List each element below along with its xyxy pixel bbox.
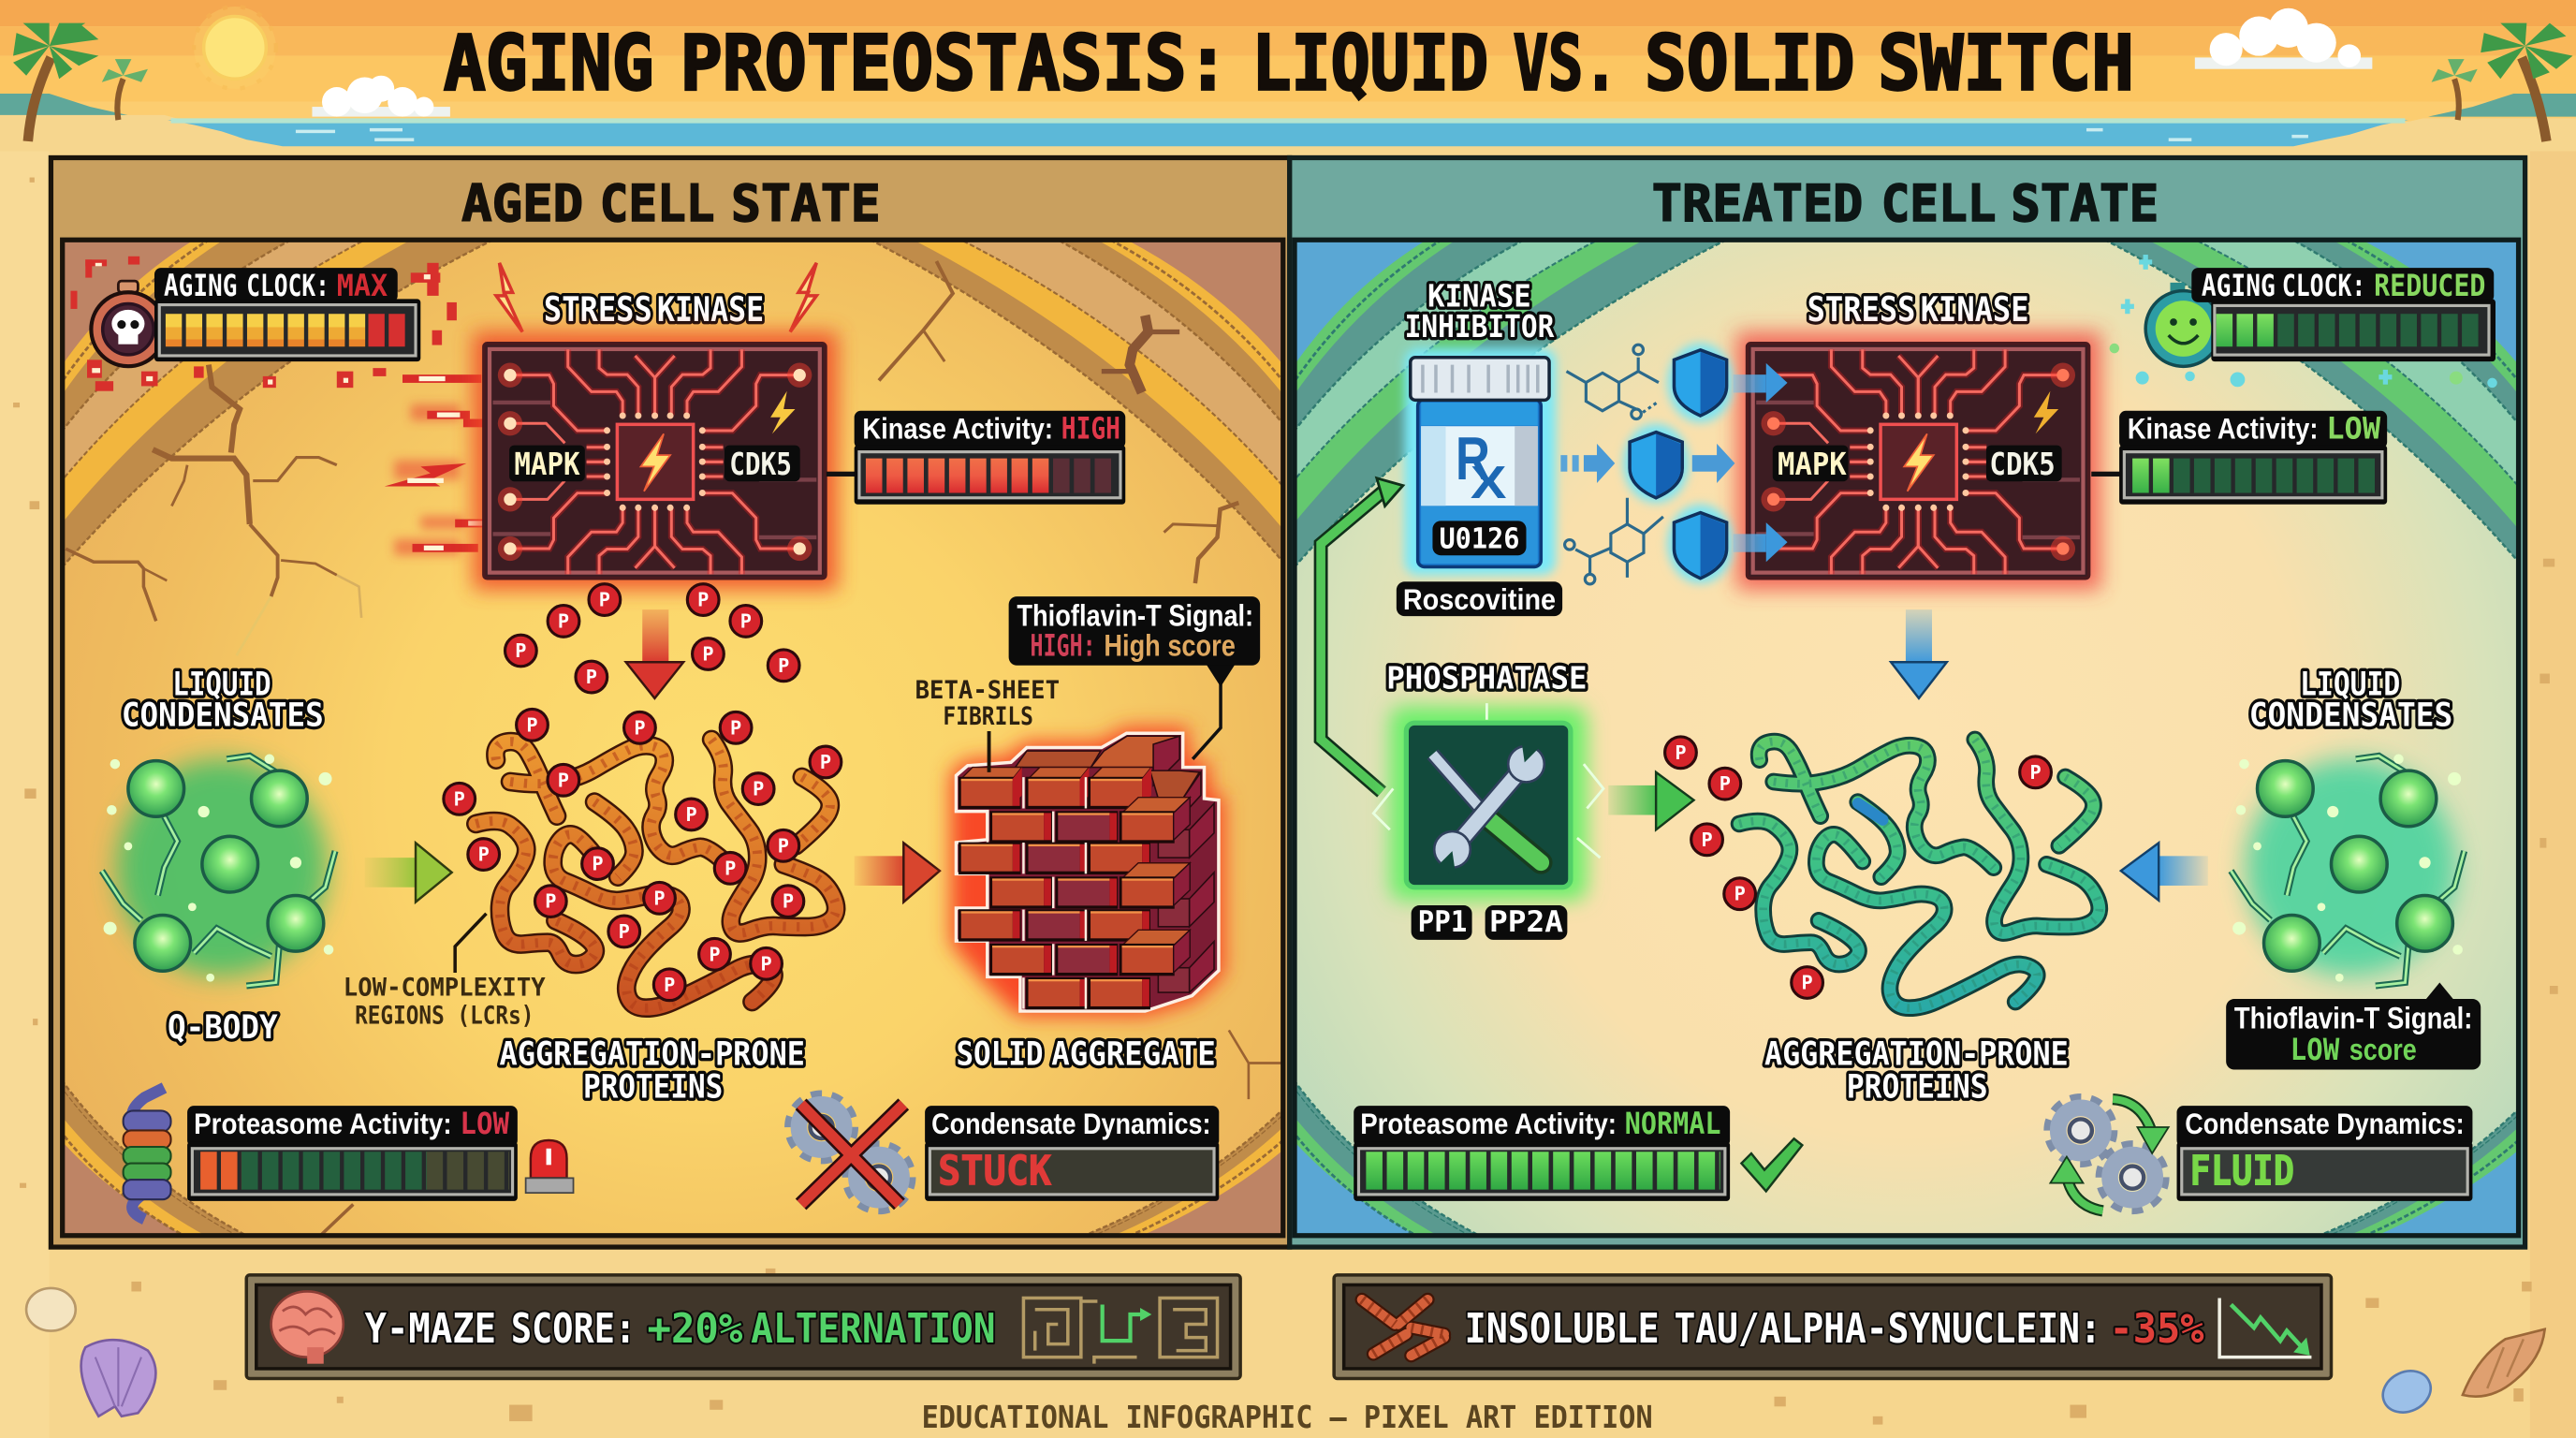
heading: aged: AGED	[461, 174, 583, 233]
released phospho groups: P	[1675, 741, 1687, 764]
aged: lightning bolts	[496, 263, 816, 332]
treated: protein labels: AGGREGATION-PRONE	[1764, 1034, 2069, 1073]
icon: alarm light	[526, 1140, 574, 1193]
icon: shield bottom	[1674, 513, 1727, 579]
label: aging clock max: MAX	[337, 270, 388, 303]
title: AGING	[444, 21, 654, 109]
icon: shield top	[1674, 350, 1727, 416]
treated: proteasome activity gauge	[1354, 1106, 1730, 1201]
icon: palm tree left	[13, 23, 148, 141]
aged: phospho groups above arrow: P	[702, 643, 714, 666]
aged: phospho groups above arrow: P	[515, 639, 526, 662]
label: aging clock reduced: REDUCED	[2374, 270, 2485, 303]
aged: kinase chip	[473, 332, 838, 590]
aged: solid aggregate label: AGGREGATE	[1051, 1034, 1216, 1073]
icon: conch shell	[2463, 1329, 2545, 1397]
treated: proteasome activity gauge: NORMAL	[1625, 1108, 1720, 1141]
icon: blue pebble	[2376, 1363, 2437, 1420]
treated: proteasome activity gauge: Proteasome Activity:	[1360, 1107, 1617, 1140]
phospho marks on tangle: P	[592, 853, 604, 875]
treated: kinase inhibitor label: INHIBITOR	[1405, 308, 1555, 345]
label: aging clock reduced: CLOCK:	[2282, 270, 2365, 303]
aged: LCR callout: LOW-COMPLEXITY	[344, 975, 546, 1003]
treated: stress kinase label: STRESS	[1808, 289, 1915, 330]
cell background: aged	[65, 242, 1281, 1234]
icon: purple shell	[81, 1340, 155, 1416]
title: VS.	[1513, 21, 1618, 109]
released phospho groups: P	[1734, 883, 1746, 905]
label: CDK5: CDK5	[1989, 446, 2056, 482]
aged: q-body label: Q-BODY	[168, 1008, 278, 1047]
label: CDK5: CDK5	[729, 446, 792, 482]
phospho marks on tangle: P	[783, 890, 794, 913]
treated: condensate dynamics: FLUID	[2190, 1147, 2294, 1195]
title: SOLID	[1645, 21, 1855, 109]
title	[444, 21, 2134, 109]
treated: shields and inhibition arrows	[1560, 344, 1788, 583]
panel: treated cell state	[1290, 157, 2525, 1247]
phospho marks on tangle: P	[558, 769, 569, 791]
label: aging clock reduced: AGING	[2202, 270, 2276, 303]
aged: beta-sheet fibrils callout: BETA-SHEET	[915, 677, 1060, 705]
aged: proteasome activity gauge	[187, 1106, 518, 1201]
phospho marks on tangle: P	[778, 834, 789, 857]
heading: treated: STATE	[2011, 174, 2159, 233]
aged: down arrow	[626, 609, 683, 698]
aged: solid aggregate label: SOLID	[956, 1034, 1043, 1073]
treated: protein labels: PROTEINS	[1847, 1067, 1988, 1106]
aged: LCR callout	[344, 914, 546, 1030]
result plaque: insoluble tau	[1334, 1275, 2331, 1378]
treated: aging clock gauge	[2110, 255, 2497, 388]
heading: treated: CELL	[1881, 174, 1996, 233]
released phospho groups: P	[1802, 972, 1813, 994]
heading: treated: TREATED	[1652, 174, 1863, 233]
treated: kinase activity gauge	[2091, 411, 2387, 505]
treated: condensate dynamics: Condensate Dynamics:	[2185, 1107, 2465, 1140]
treated: phosphatase label: PHOSPHATASE	[1386, 659, 1587, 696]
aged: protein labels: PROTEINS	[583, 1067, 723, 1106]
footer: EDUCATIONAL INFOGRAPHIC — PIXEL ART EDITION	[922, 1399, 1653, 1435]
aged: motion sparks	[385, 374, 487, 555]
icon: check mark	[1741, 1138, 1802, 1191]
title: PROTEOSTASIS:	[681, 21, 1229, 109]
treated: thioflavin-T callout: LOW	[2291, 1034, 2340, 1067]
icon: cream shell	[26, 1288, 76, 1331]
gauge bar: aging clock	[2211, 299, 2496, 361]
label: MAPK: MAPK	[514, 446, 580, 482]
aged: solid aggregate label	[956, 1034, 1216, 1073]
back blocks	[1016, 736, 1214, 992]
icon: chip bolt	[640, 433, 670, 492]
phospho marks on tangle: P	[545, 890, 556, 913]
treated: molecule icons	[1565, 345, 1663, 584]
icon: cloud left	[312, 76, 450, 117]
result plaque: y-maze score: Y-MAZE	[365, 1305, 496, 1353]
phospho marks on tangle: P	[685, 803, 697, 826]
treated: drug bottle	[1405, 348, 1556, 575]
panel: aged cell state	[51, 157, 1290, 1247]
cell background: treated	[1297, 242, 2516, 1234]
aged: protein labels: AGGREGATION-PRONE	[500, 1034, 805, 1073]
treated: stress kinase label: KINASE	[1921, 289, 2029, 330]
title: LIQUID	[1251, 21, 1488, 109]
treated: kinase inhibitor label	[1405, 277, 1555, 345]
aged: solid aggregate brick stack	[955, 733, 1219, 1011]
phospho marks on tangle: P	[526, 713, 538, 736]
treated: thioflavin-T callout: Thioflavin-T Signal:	[2234, 1002, 2472, 1035]
treated: drug bottle: R	[1456, 424, 1490, 492]
aged: phospho groups above arrow: P	[778, 654, 789, 677]
sky and ocean banner	[0, 0, 2576, 151]
treated: kinase chip	[1736, 332, 2101, 590]
aged: phospho groups above arrow: P	[740, 609, 752, 632]
phospho marks on tangle: P	[820, 751, 831, 773]
aged: phospho groups above arrow: P	[586, 666, 597, 688]
icon: maze	[1023, 1298, 1218, 1364]
label: aging clock max	[154, 268, 398, 303]
heading: aged	[461, 174, 881, 233]
result plaque: y-maze score: SCORE:	[511, 1305, 636, 1353]
treated: thioflavin-T callout	[2226, 983, 2481, 1070]
aged: beta-sheet fibrils callout	[915, 677, 1060, 772]
treated: liquid condensates label: CONDENSATES	[2249, 697, 2452, 735]
phospho marks on tangle: P	[753, 778, 764, 800]
arrows: blue	[1560, 363, 1788, 562]
gauge bar: aging clock	[154, 299, 420, 361]
icon: brain	[271, 1291, 344, 1364]
aged: thioflavin-T callout	[1009, 596, 1260, 759]
treated: kinase activity gauge: LOW	[2326, 413, 2381, 447]
aged: kinase activity gauge	[827, 411, 1125, 505]
icon: protein fragments	[1362, 1299, 1444, 1356]
heading: treated	[1652, 174, 2159, 233]
title: SWITCH	[1878, 21, 2134, 109]
icon: cloud right	[2195, 8, 2372, 69]
icon: skull stopwatch	[91, 281, 165, 366]
icon: smiley stopwatch	[2145, 283, 2221, 366]
treated: condensate dynamics	[2177, 1106, 2472, 1201]
treated: blue arrow from condensates	[2121, 843, 2208, 901]
aged: beta-sheet fibrils callout: FIBRILS	[943, 703, 1033, 731]
icon: sun	[194, 7, 276, 89]
aged: kinase activity gauge: HIGH	[1061, 413, 1120, 447]
treated: roscovitine label: Roscovitine	[1403, 582, 1556, 616]
aged: liquid condensates label	[122, 665, 324, 735]
aged: aging clock gauge	[70, 257, 457, 391]
treated: liquid condensates label	[2249, 665, 2452, 735]
aged: condensate dynamics: Condensate Dynamics:	[931, 1107, 1211, 1140]
treated: green arrow to proteins	[1608, 772, 1694, 829]
icon: small bolt	[770, 391, 795, 433]
result plaque: insoluble tau: INSOLUBLE	[1465, 1305, 1660, 1353]
aged: stress kinase label: STRESS	[544, 289, 652, 330]
result plaque: y-maze score: +20%	[648, 1305, 743, 1353]
result plaque: y-maze score	[246, 1275, 1240, 1378]
phospho marks on tangle: P	[709, 943, 721, 965]
treated: PP1 and PP2A labels	[1412, 905, 1567, 940]
aged: proteasome icon	[124, 1088, 171, 1219]
label: aging clock max: AGING	[164, 270, 237, 303]
debris sparks	[70, 257, 457, 391]
result plaque: y-maze score: ALTERNATION	[751, 1305, 996, 1353]
treated: liquid condensates label: LIQUID	[2300, 665, 2400, 703]
sparkles	[2110, 255, 2497, 388]
phospho marks on tangle: P	[634, 716, 646, 739]
phospho marks on tangle: P	[730, 716, 741, 739]
treated: condensate cluster	[2231, 755, 2465, 986]
aged: liquid condensates label: CONDENSATES	[122, 697, 324, 735]
phospho marks on tangle: P	[454, 787, 465, 810]
treated: PP1 and PP2A labels: PP2A	[1489, 905, 1563, 939]
aged: arrow to aggregate	[855, 843, 940, 902]
aged: phospho groups above arrow: P	[558, 609, 569, 632]
aged: phospho groups above arrow: P	[599, 589, 610, 611]
treated: drug bottle: X	[1471, 458, 1507, 508]
aged: protein labels	[500, 1034, 805, 1106]
phospho marks on tangle: P	[619, 920, 630, 943]
phospho marks on tangle: P	[761, 952, 772, 975]
aged: stress kinase label	[544, 289, 764, 330]
aged: LCR callout: REGIONS (LCRs)	[355, 1002, 534, 1030]
label: aging clock max: CLOCK:	[246, 270, 329, 303]
aged: protein tangle	[444, 709, 842, 1008]
aged: proteasome activity gauge: LOW	[460, 1108, 510, 1141]
treated: stress kinase label	[1808, 289, 2029, 330]
treated: feedback green arrow	[1321, 478, 1403, 792]
aged: thioflavin-T callout: HIGH:	[1030, 629, 1096, 663]
treated: blue down arrow	[1891, 609, 1947, 698]
released phospho groups: P	[1701, 829, 1713, 851]
phospho marks on tangle	[444, 709, 842, 1001]
aged: thioflavin-T callout: Thioflavin-T Signal:	[1017, 599, 1253, 633]
aged: liquid condensates label: LIQUID	[172, 665, 271, 703]
aged: condensate dynamics	[925, 1106, 1219, 1201]
treated: PP1 and PP2A labels: PP1	[1418, 905, 1467, 939]
icon: palm tree right	[2432, 23, 2572, 141]
released phospho groups: P	[1720, 772, 1731, 795]
treated: kinase inhibitor label: KINASE	[1427, 277, 1531, 314]
icon: shield middle	[1630, 433, 1682, 498]
aged: kinase activity gauge: Kinase Activity:	[862, 412, 1053, 446]
released phospho groups	[1665, 737, 2051, 998]
treated: phosphatase tool icon	[1373, 703, 1603, 901]
phospho marks on tangle: P	[664, 974, 675, 996]
result plaque: insoluble tau: -35%	[2110, 1305, 2204, 1353]
icon: jammed gears	[791, 1096, 910, 1209]
phospho marks on tangle: P	[724, 857, 736, 879]
aged: phospho groups above arrow: P	[697, 589, 709, 611]
aged: proteasome activity gauge: Proteasome Activity:	[194, 1107, 452, 1140]
aged: q-body condensate	[102, 755, 335, 986]
released phospho groups: P	[2029, 761, 2042, 784]
treated: kinase activity gauge: Kinase Activity:	[2128, 412, 2318, 446]
aged: phospho groups above arrow	[505, 584, 799, 693]
phospho marks on tangle: P	[653, 887, 666, 909]
treated: protein labels	[1764, 1034, 2069, 1106]
heading: aged: STATE	[731, 174, 881, 233]
result plaque: insoluble tau: TAU/ALPHA-SYNUCLEIN:	[1674, 1305, 2101, 1353]
label: aging clock reduced	[2191, 268, 2494, 303]
aged: stress kinase label: KINASE	[657, 289, 764, 330]
aged: thioflavin-T callout: High score	[1104, 628, 1236, 662]
aged: arrow to proteins	[365, 843, 452, 902]
icon: falling chart	[2219, 1298, 2311, 1357]
phospho marks on tangle: P	[478, 844, 490, 866]
treated: thioflavin-T callout: score	[2349, 1033, 2417, 1066]
label: MAPK: MAPK	[1778, 446, 1847, 482]
treated: protein tangle	[1665, 737, 2100, 1008]
heading: aged: CELL	[600, 174, 714, 233]
icon: spinning gears	[2050, 1099, 2169, 1211]
aged: condensate dynamics: STUCK	[938, 1147, 1052, 1195]
label: U0126: U0126	[1439, 522, 1519, 555]
